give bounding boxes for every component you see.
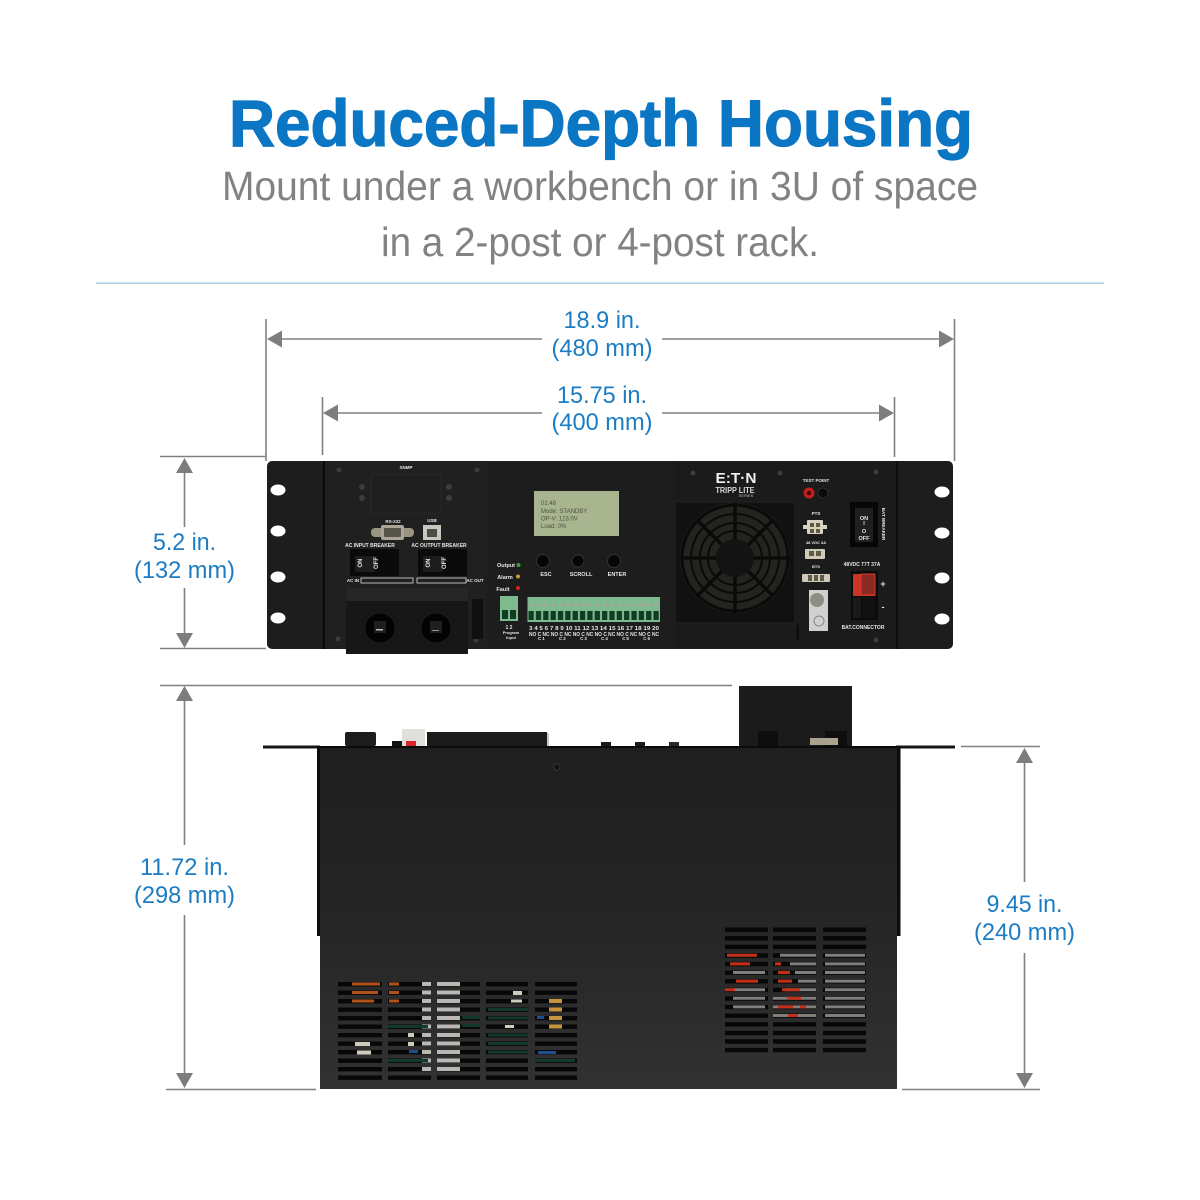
cooling fan	[675, 502, 795, 623]
AC terminal labels	[347, 578, 484, 583]
PTS connector: PTS	[812, 511, 820, 516]
LCD display: 01:48	[541, 501, 557, 507]
AC output breaker: OFF	[442, 557, 448, 569]
LCD display: Mode: STANDBY	[541, 509, 587, 515]
dimension: chassis depth 9.45 in: 9.45 in.	[986, 891, 1062, 918]
program input terminal: 1 2	[506, 625, 513, 631]
subtitle	[222, 163, 978, 265]
Eaton logo: TRIPP LITE	[716, 486, 755, 495]
chassis front panel	[267, 461, 953, 649]
dimension: height 5.2 in: 5.2 in.	[153, 529, 216, 556]
BTS connector: BTS	[812, 564, 820, 569]
dimension: height 5.2 in	[134, 456, 266, 648]
AC input breaker: OFF	[374, 557, 380, 569]
AC terminal cover	[346, 588, 483, 654]
dimension: chassis depth 9.45 in: (240 mm)	[974, 919, 1075, 946]
chassis body	[317, 746, 320, 936]
battery breaker switch: BAT BREAKER	[881, 508, 886, 541]
AC output breaker: ON	[426, 558, 432, 568]
PTS connector	[803, 511, 827, 534]
right vent	[725, 928, 866, 1052]
AC output breaker	[411, 543, 467, 576]
Eaton logo: SERIES	[739, 493, 754, 498]
dimension: rack width 15.75 in: 15.75 in.	[557, 382, 647, 409]
battery breaker switch: OFF	[858, 536, 870, 542]
48 VDC connector: 48 VDC 3A	[806, 540, 826, 545]
relay terminal block: 3 4 5 6 7 8 9 10 11 12 13 14 15 16 17 18 19 20	[529, 626, 659, 632]
dimension: rack width 15.75 in	[322, 382, 894, 457]
battery breaker switch: I	[863, 521, 865, 527]
LCD display	[534, 491, 619, 536]
left vent	[338, 982, 577, 1080]
ground terminal	[809, 590, 828, 631]
battery breaker switch: O	[862, 529, 867, 535]
SNMP slot	[371, 465, 441, 513]
program input terminal	[500, 596, 520, 640]
terminal cover	[739, 686, 852, 746]
battery connector	[842, 562, 886, 631]
dimension: depth 11.72 in: (298 mm)	[134, 882, 235, 909]
control buttons: SCROLL	[570, 572, 593, 578]
dimension: overall width 18.9 in: (480 mm)	[552, 335, 652, 362]
dimension: height 5.2 in: (132 mm)	[134, 557, 235, 584]
front view of unit	[267, 461, 953, 654]
relay terminal block: C1 C2 C3 C4 C5 C6	[538, 636, 650, 641]
battery breaker switch: ON	[860, 516, 868, 522]
status indicators	[496, 563, 520, 593]
BTS connector	[802, 564, 830, 582]
rear connector	[758, 731, 847, 746]
dimension: chassis depth 9.45 in	[902, 746, 1075, 1090]
dimension: overall width 18.9 in	[266, 307, 954, 461]
test point	[803, 478, 829, 498]
relay terminal block	[528, 597, 660, 641]
status indicators: Output	[497, 563, 515, 569]
dimension: depth 11.72 in	[134, 686, 732, 1090]
subtitle: in a 2-post or 4-post rack.	[381, 219, 819, 265]
battery connector: +	[880, 579, 886, 589]
USB port	[423, 518, 441, 540]
relay terminal block: NO C NC NO C NC NO C NC NO C NC NO C NC NO C NC	[529, 632, 659, 638]
status indicators: Fault	[496, 587, 510, 593]
rack ear mounting holes	[270, 484, 950, 624]
LCD display: Load: 0%	[541, 524, 567, 530]
battery breaker switch	[850, 502, 886, 547]
48 VDC connector	[805, 540, 826, 559]
AC input breaker	[345, 543, 399, 576]
control buttons: ENTER	[608, 572, 626, 578]
test point: TEST POINT	[803, 478, 829, 483]
AC terminal labels: AC IN	[347, 578, 359, 583]
status indicators: Alarm	[497, 575, 513, 581]
Eaton logo	[716, 470, 756, 498]
AC output breaker: AC OUTPUT BREAKER	[411, 543, 467, 549]
top view of unit	[263, 686, 955, 1089]
control buttons: ESC	[540, 572, 552, 578]
USB port: USB	[427, 518, 437, 523]
subtitle: Mount under a workbench or in 3U of space	[222, 163, 978, 209]
AC terminal labels: AC OUT	[466, 578, 484, 583]
dimension: depth 11.72 in: 11.72 in.	[140, 854, 229, 881]
battery connector: -	[882, 602, 884, 612]
control buttons	[536, 554, 626, 578]
RS-232 port	[371, 519, 414, 540]
RS-232 port: RS-232	[385, 519, 401, 524]
battery connector: BAT.CONNECTOR	[842, 625, 885, 631]
AC input breaker: ON	[358, 558, 364, 568]
program input terminal: Program	[503, 630, 520, 635]
SNMP slot: SNMP	[399, 465, 413, 470]
program input terminal: Input	[506, 635, 517, 640]
mounting flanges	[263, 746, 320, 748]
panel screws	[336, 468, 878, 642]
dimension: overall width 18.9 in: 18.9 in.	[564, 307, 640, 334]
Eaton logo: E:T·N	[716, 470, 756, 487]
title: Reduced-Depth Housing	[229, 86, 973, 160]
dimension: rack width 15.75 in: (400 mm)	[552, 409, 652, 436]
AC input breaker: AC INPUT BREAKER	[345, 543, 395, 549]
top protrusions	[345, 729, 679, 746]
battery connector: 48VDC 77T 37A	[844, 562, 881, 568]
LCD display: OP-V: 123.0V	[541, 516, 578, 522]
